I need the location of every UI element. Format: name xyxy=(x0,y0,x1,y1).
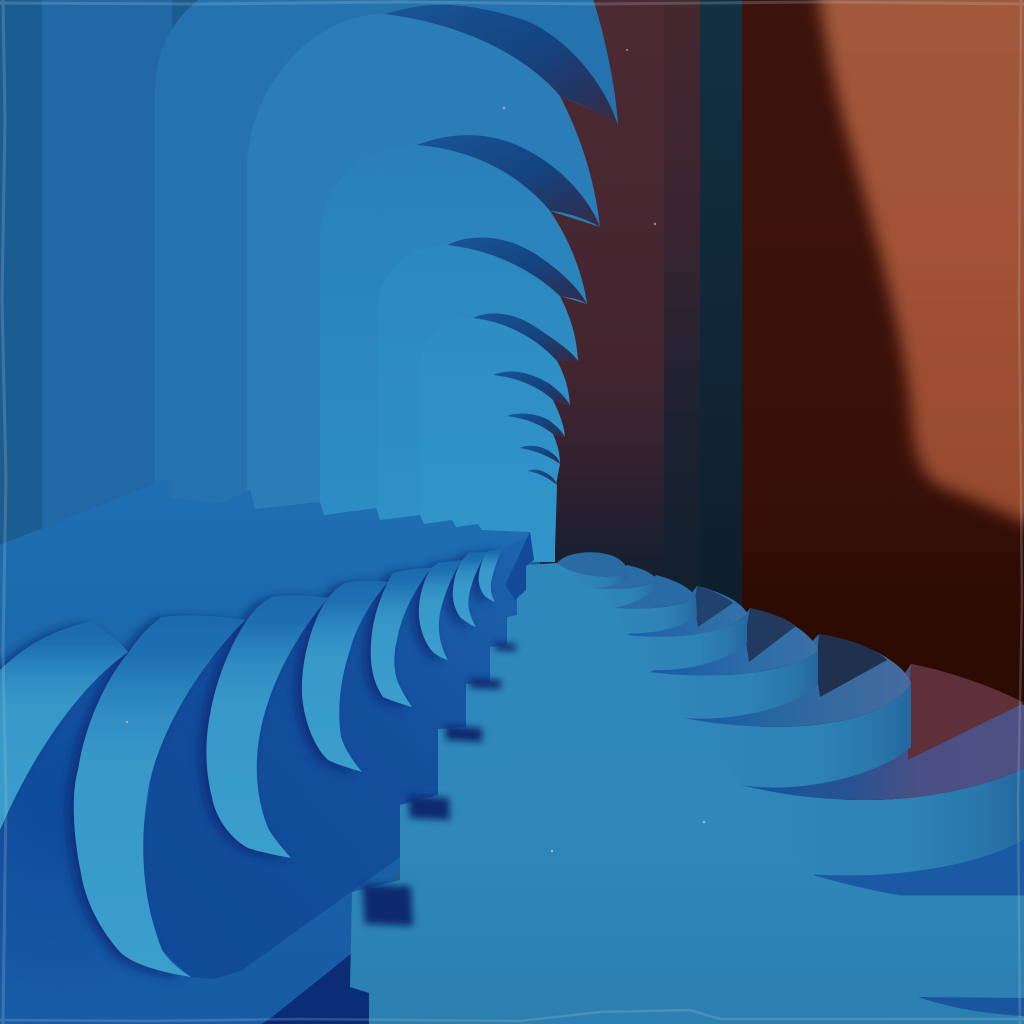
ring 5 xyxy=(419,560,462,660)
disc 7 red shadow zone xyxy=(908,664,1024,760)
arch 4 xyxy=(378,245,578,535)
stair cast shadows xyxy=(362,642,516,926)
crescent 2 xyxy=(417,135,600,227)
bottom edge scratch xyxy=(0,1010,1024,1021)
hollow 0 under first ring xyxy=(0,652,262,1024)
right wall: dark shadow xyxy=(725,0,1024,1024)
disc 3 xyxy=(614,575,697,633)
far wall column xyxy=(42,0,172,530)
disc 5 side xyxy=(650,650,818,719)
disc 7 xyxy=(741,664,1024,876)
ring 6 xyxy=(453,552,486,627)
ring 7 xyxy=(479,548,503,602)
disc 2 xyxy=(594,565,657,608)
hollow discs behind rings xyxy=(141,535,531,979)
crescent 8 xyxy=(528,470,557,485)
arch 5 xyxy=(420,318,570,540)
disc 7 side xyxy=(741,768,1024,876)
disc 6 top xyxy=(684,634,911,727)
left edge scratch xyxy=(2,0,6,1024)
crescent shadows on arches xyxy=(385,5,618,485)
teal wall panel xyxy=(700,0,742,620)
crescent 5 xyxy=(493,372,570,405)
disc 6 xyxy=(684,634,911,788)
paper specks xyxy=(126,49,705,852)
disc 6 shadow zone xyxy=(816,634,887,697)
arch 1 xyxy=(155,0,618,520)
ring 2 xyxy=(206,595,328,858)
lit rings xyxy=(0,548,503,977)
disc 1 top xyxy=(557,552,627,577)
ring 1 xyxy=(74,616,245,977)
arch 2 xyxy=(247,14,600,525)
dark wedge at bottom xyxy=(262,953,372,1024)
disc 4 xyxy=(627,586,747,670)
slab corner dark side xyxy=(505,532,534,600)
right wall: orange light patch xyxy=(815,0,1024,535)
shadow step 4 xyxy=(470,678,501,689)
disc 1 xyxy=(557,552,627,588)
pillar face under arches xyxy=(505,470,555,562)
arch 6 xyxy=(452,375,565,540)
disc 1 side xyxy=(557,563,627,588)
shadow step 1 xyxy=(362,884,413,926)
lower right crescent xyxy=(814,840,1024,895)
ring 3 xyxy=(302,581,388,772)
stepped lit mass xyxy=(350,563,1024,1024)
disc 4 shadow zone xyxy=(694,586,733,627)
disc 5 top xyxy=(650,608,818,676)
arch 8 xyxy=(497,448,557,550)
ring 0 xyxy=(0,622,128,830)
disc 7 top xyxy=(741,664,1024,800)
crescent 3 xyxy=(447,238,587,304)
shadow step 3 xyxy=(445,725,482,742)
crescent 1 xyxy=(385,5,618,125)
disc 6 side xyxy=(684,683,911,788)
disc 4 side xyxy=(627,613,747,670)
floor slab xyxy=(0,478,532,1024)
maroon wall panel xyxy=(540,0,664,620)
arch 3 xyxy=(320,145,587,530)
shadow step 5 xyxy=(495,642,516,651)
arch 7 xyxy=(477,416,560,545)
crescent 4 xyxy=(473,313,578,361)
maroon wall panel dark band xyxy=(664,0,702,620)
left wall base xyxy=(0,0,540,560)
disc 2 top xyxy=(594,565,657,589)
disc 3 side xyxy=(614,598,697,633)
top edge scratch xyxy=(0,2,1024,4)
disc 4 top xyxy=(627,586,747,637)
disc 2 side xyxy=(594,580,657,608)
crescent 6 xyxy=(507,414,565,437)
crescent 7 xyxy=(520,446,560,464)
bottom right crescent xyxy=(918,997,1024,1016)
disc 3 top xyxy=(614,575,696,609)
ring 4 xyxy=(371,568,431,707)
disc 5 shadow zone xyxy=(745,608,796,662)
shadow step 2 xyxy=(408,795,450,820)
right edge scratch xyxy=(1018,0,1022,1024)
disc 5 xyxy=(650,608,818,719)
